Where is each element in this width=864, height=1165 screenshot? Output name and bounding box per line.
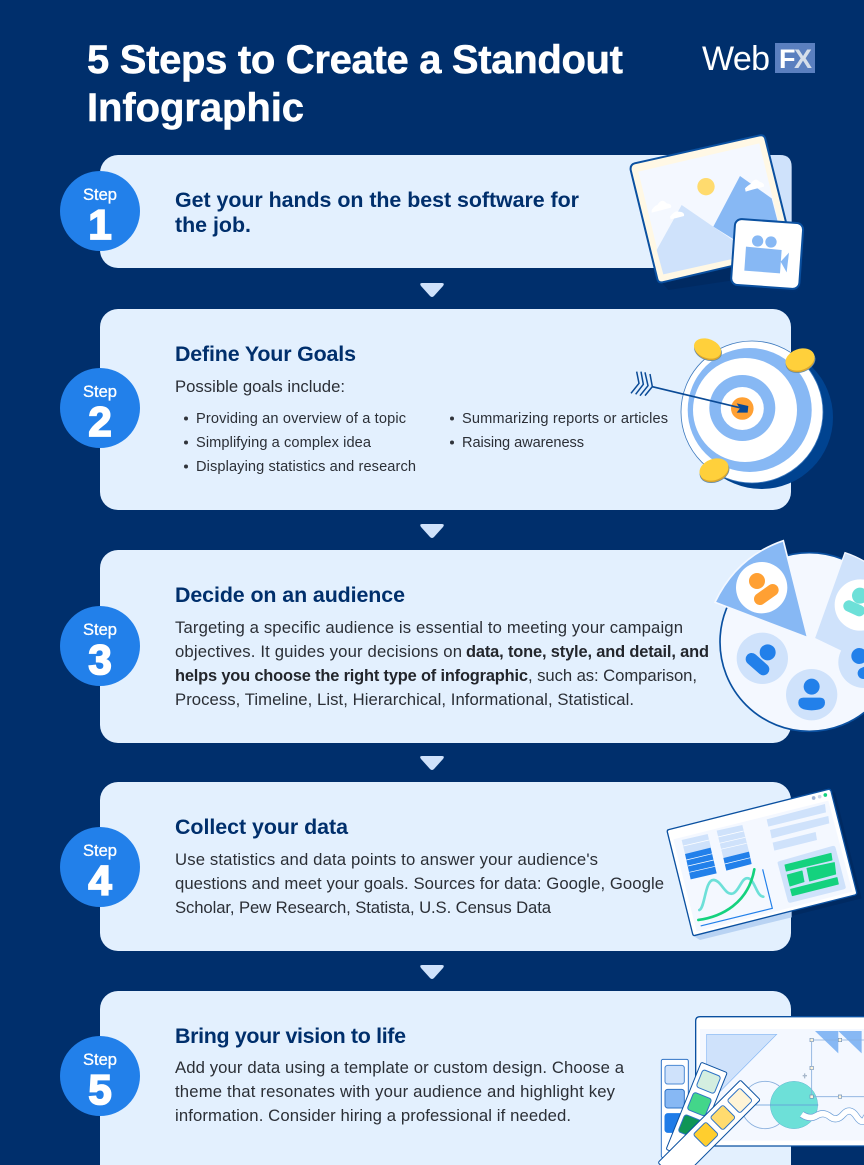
panel: step 1 [60, 135, 805, 292]
arrow: step 4 to 5 [420, 965, 444, 979]
step 3 body text [175, 618, 709, 709]
panel: step 3 [60, 541, 864, 743]
step 4 body text: questions and meet your goals. Sources for data: Google, Google [175, 874, 664, 893]
step 4 badge [60, 827, 140, 907]
step 1 heading: the job. [175, 213, 251, 237]
panel: step 2 [60, 309, 833, 510]
step 4 badge: Step [83, 842, 117, 860]
step 2 badge: 2 [88, 398, 112, 445]
step 3 badge: 3 [88, 636, 112, 683]
icon: picture and video camera [631, 135, 805, 292]
step 1 badge [60, 171, 140, 251]
step 5 heading: Bring your vision to life [175, 1024, 406, 1048]
step 2 goals list, left column: Displaying statistics and research [196, 459, 416, 475]
step 3 body text: , such as: Comparison, [528, 666, 697, 685]
icon: target with arrow and coins [631, 335, 833, 489]
step 2 badge: Step [83, 383, 117, 401]
step 5 badge [60, 1036, 140, 1116]
WebFX logo: Web [702, 40, 770, 78]
step 4 body text: Use statistics and data points to answer your audience's [175, 850, 598, 869]
step 4 badge: 4 [88, 857, 112, 904]
step 3 body text: objectives. It guides your decisions on [175, 642, 462, 661]
step 1 heading: Get your hands on the best software for [175, 188, 579, 212]
step 5 body text [175, 1058, 625, 1125]
panel: step 4 [60, 782, 862, 951]
step 3 body text: Process, Timeline, List, Hierarchical, Informational, Statistical. [175, 690, 634, 709]
step 1 card [100, 155, 791, 268]
step 1 badge: Step [83, 186, 117, 204]
WebFX logo [702, 40, 815, 78]
step 2 goals list, right column: Raising awareness [462, 435, 584, 451]
step 5 badge: 5 [88, 1066, 112, 1113]
arrow: step 1 to 2 [420, 283, 444, 297]
step 2 goals list, left column: Simplifying a complex idea [196, 435, 372, 451]
step 2 goals list, left column [184, 411, 416, 475]
icon: dashboard window [667, 789, 862, 940]
WebFX logo: X [794, 44, 812, 74]
step 4 body text: Scholar, Pew Research, Statista, U.S. Census Data [175, 898, 552, 917]
step 2 goals list, left column: Providing an overview of a topic [196, 411, 406, 427]
step 5 body text: Add your data using a template or custom design. Choose a [175, 1058, 625, 1077]
panel: step 5 [60, 991, 864, 1165]
step 2 goals list, right column [450, 411, 668, 451]
title: 5 Steps to Create a Standout [87, 38, 623, 82]
step 4 body text [175, 850, 664, 917]
step 2 heading: Define Your Goals [175, 342, 356, 366]
title [87, 38, 623, 130]
step 4 heading: Collect your data [175, 815, 349, 839]
step 3 badge [60, 606, 140, 686]
step 2 badge [60, 368, 140, 448]
step 3 card [100, 550, 791, 743]
WebFX logo: F [779, 44, 796, 74]
step 1 heading [175, 188, 579, 237]
arrow: step 2 to 3 [420, 524, 444, 538]
step 4 card [100, 782, 791, 951]
arrow: step 3 to 4 [420, 756, 444, 770]
title: Infographic [87, 86, 304, 130]
step 5 card [100, 991, 791, 1165]
step 3 badge: Step [83, 621, 117, 639]
step 2 intro: Possible goals include: [175, 377, 345, 396]
step 3 body text: data, tone, style, and detail, and [466, 643, 709, 661]
step 3 body text: Targeting a specific audience is essential to meeting your campaign [175, 618, 683, 637]
step 2 card [100, 309, 791, 510]
step 1 badge: 1 [88, 201, 112, 248]
icon: design canvas and colour swatches [658, 1017, 864, 1165]
step 3 body text: helps you choose the right type of infographic [175, 667, 528, 685]
step 5 body text: information. Consider hiring a professional if needed. [175, 1106, 571, 1125]
step 2 goals list, right column: Summarizing reports or articles [462, 411, 668, 427]
icon: audience pie [715, 541, 864, 731]
step 5 body text: theme that resonates with your audience and highlight key [175, 1082, 616, 1101]
step 5 badge: Step [83, 1051, 117, 1069]
step 3 heading: Decide on an audience [175, 583, 405, 607]
